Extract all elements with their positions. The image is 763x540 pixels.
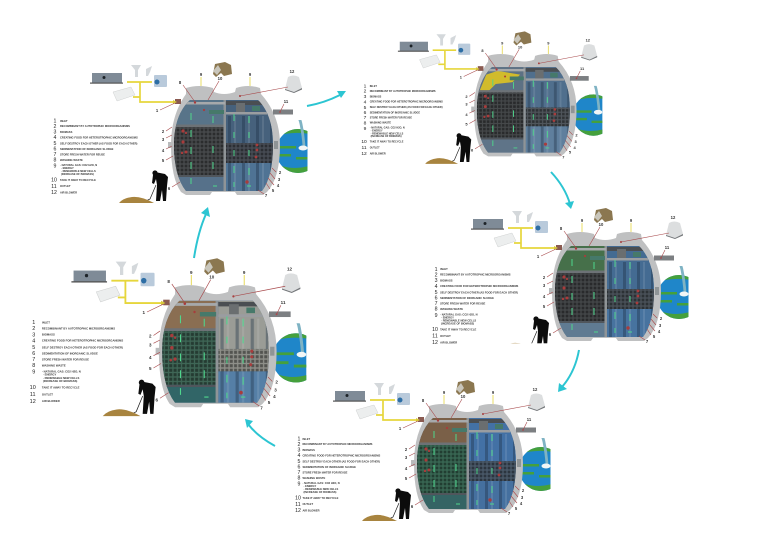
tank diagram: stage 1: 5 — [162, 158, 165, 163]
legend: stage 5: - ENERGY — [43, 373, 56, 377]
legend: stage 1: WASHING WASTE — [60, 158, 83, 162]
legend: stage 2: 11 — [362, 145, 367, 151]
legend: stage 2: 6 — [364, 110, 367, 116]
legend: stage 1: 4 — [54, 135, 57, 141]
tank diagram: stage 4: 7 — [508, 511, 511, 516]
panel: stage 1 (top left) — [51, 62, 310, 203]
legend: stage 2: 7 — [364, 115, 367, 121]
legend: stage 5: AIR BLOWER — [42, 399, 60, 403]
tank diagram: stage 3: 9 — [630, 218, 633, 223]
legend: stage 4: 1 — [298, 436, 301, 442]
tank diagram: stage 5: 2 — [275, 380, 278, 385]
arrow: stage 3 to stage 4 — [558, 350, 579, 392]
legend: stage 5: BIOMASS — [42, 333, 55, 337]
tank diagram: stage 4: 10 — [461, 394, 466, 399]
legend: stage 4: 3 — [298, 448, 301, 454]
tank diagram: stage 4: 1 — [399, 426, 402, 431]
tank diagram: stage 5: 2 — [149, 334, 152, 339]
tank diagram: stage 2: 12 — [586, 38, 591, 43]
legend: stage 4: - ENERGY — [304, 484, 317, 488]
legend: stage 2: 4 — [364, 99, 367, 105]
legend: stage 3: INLET — [440, 267, 448, 271]
tank diagram: stage 2: 4 — [574, 145, 577, 150]
legend: stage 5: 3 — [32, 332, 35, 338]
legend: stage 1: BIOMASS — [60, 130, 73, 134]
tank diagram: stage 2: 4 — [465, 112, 468, 117]
legend: stage 1: - NATURAL GAS: CO2 H2O, N — [60, 163, 97, 167]
legend: stage 3: (INCREASE OF BIOMASS) — [441, 322, 474, 326]
legend: stage 2: 1 — [364, 84, 367, 90]
legend: stage 1: 8 — [54, 158, 57, 164]
legend: stage 4: SELF DESTROY EACH OTHER (AS FOOD FOR EACH OTHER) — [302, 459, 380, 463]
legend: stage 4 — [295, 436, 380, 514]
tank diagram: stage 5: 5 — [149, 366, 152, 371]
panel: stage 4 (bottom centre) — [295, 380, 553, 521]
legend: stage 2: SEDIMENTATION OF INORGANIC SLUDGE — [370, 111, 420, 114]
legend: stage 4: RECOMBINANT BY AUTOTROPHIC MICROORGANISMS — [302, 442, 373, 446]
legend: stage 5: 6 — [32, 351, 35, 357]
legend: stage 4: INLET — [302, 437, 311, 441]
tank diagram: stage 3: 4 — [543, 294, 546, 299]
tank diagram: stage 4: 2 — [522, 488, 525, 493]
legend: stage 1: 6 — [54, 146, 57, 152]
legend: stage 1: 10 — [51, 178, 57, 184]
legend: stage 2: BIOMASS — [370, 95, 382, 98]
tank diagram: stage 4: 2 — [405, 447, 408, 452]
tank diagram: stage 5: 3 — [149, 343, 152, 348]
tank diagram: stage 4: 11 — [527, 417, 532, 422]
legend: stage 5: (INCREASE OF BIOMASS) — [43, 379, 77, 383]
tank diagram: stage 5: 10 — [209, 274, 215, 279]
legend: stage 3: STORE FRESH WATER FOR REUSE — [440, 301, 486, 306]
legend: stage 1: 2 — [54, 124, 57, 130]
legend: stage 3: 12 — [432, 340, 438, 346]
legend: stage 4: 9 — [298, 482, 301, 488]
legend: stage 3: RECOMBINANT BY AUTOTROPHIC MICROORGANISMS — [440, 273, 511, 277]
legend: stage 1: 3 — [54, 130, 57, 136]
tank diagram: stage 2: 11 — [580, 66, 585, 71]
legend: stage 4: CREATING FOOD FOR HETEROTROPHIC MICROORGANISMS — [302, 453, 380, 457]
tank diagram: stage 4: 9 — [492, 390, 495, 395]
legend: stage 5: 10 — [30, 385, 36, 391]
legend: stage 3: - ENERGY — [441, 316, 454, 320]
tank diagram: stage 2: 5 — [569, 150, 572, 155]
tank diagram: stage 1: 12 — [290, 69, 295, 74]
tank diagram: stage 2: 2 — [465, 94, 468, 99]
tank diagram: stage 4: 9 — [443, 390, 446, 395]
tank diagram: stage 2: 7 — [562, 154, 565, 159]
legend: stage 3: AIR BLOWER — [440, 340, 457, 344]
legend: stage 3: 7 — [435, 301, 438, 307]
legend: stage 1: 5 — [54, 141, 57, 147]
tank diagram: stage 4: 12 — [533, 387, 538, 392]
legend: stage 3: 1 — [435, 267, 438, 273]
tank diagram: stage 3: 4 — [658, 329, 661, 334]
legend: stage 5: 8 — [32, 363, 35, 369]
legend: stage 2: STORE FRESH WATER FOR REUSE — [370, 117, 412, 120]
tank diagram: stage 3: 5 — [653, 334, 656, 339]
tank diagram: stage 2: 2 — [575, 133, 578, 138]
legend: stage 3: WASHING WASTE — [440, 307, 463, 311]
tank diagram: stage 2 — [398, 31, 605, 164]
panel: stage 2 (top right) — [361, 31, 605, 164]
tank diagram: stage 3: 9 — [581, 218, 584, 223]
tank diagram: stage 1: 8 — [179, 80, 182, 85]
legend: stage 3: 6 — [435, 295, 438, 302]
legend: stage 1: SELF DESTROY EACH OTHER (AS FOOD FOR EACH OTHER) — [60, 141, 138, 145]
legend: stage 5: OUTLET — [42, 392, 53, 396]
legend: stage 2: 8 — [364, 120, 367, 126]
tank diagram: stage 1: 9 — [249, 72, 252, 77]
legend: stage 1: AIR BLOWER — [60, 190, 77, 194]
tank diagram: stage 3: 2 — [660, 316, 663, 321]
legend: stage 4: 2 — [298, 442, 301, 448]
legend: stage 2: (INCREASE OF BIOMASS) — [371, 135, 402, 138]
tank diagram: stage 3: 10 — [599, 222, 604, 227]
legend: stage 5: INLET — [42, 320, 50, 325]
tank diagram: stage 5: 4 — [273, 394, 276, 399]
legend: stage 2: 2 — [364, 89, 367, 95]
tank diagram: stage 2: 3 — [465, 102, 468, 107]
tank diagram: stage 5 — [71, 258, 309, 416]
tank diagram: stage 1 — [90, 62, 310, 203]
legend: stage 1: INLET — [60, 119, 68, 123]
tank diagram: stage 1: 11 — [284, 99, 289, 104]
tank diagram: stage 2: 6 — [471, 148, 474, 153]
tank diagram: stage 3: 3 — [659, 323, 662, 328]
tank diagram: stage 5: 12 — [287, 266, 292, 272]
legend: stage 2: 5 — [364, 105, 367, 111]
legend: stage 1: CREATING FOOD FOR HETEROTROPHIC MICROORGANISMS — [60, 135, 138, 139]
tank diagram: stage 1: 3 — [278, 177, 281, 182]
legend: stage 2: AIR BLOWER — [370, 152, 386, 155]
legend: stage 5: WASHING WASTE — [42, 363, 66, 367]
legend: stage 1: 11 — [51, 184, 57, 190]
legend: stage 2: - ENERGY — [371, 130, 383, 133]
legend: stage 3: 3 — [435, 278, 438, 284]
legend: stage 2: - RENEWABLE NEW CELLS — [371, 132, 404, 135]
legend: stage 4: - RENEWABLE NEW CELLS — [304, 487, 339, 491]
tank diagram: stage 1: 2 — [279, 170, 282, 175]
legend: stage 5: 9 — [32, 370, 35, 376]
tank diagram: stage 2: 5 — [465, 121, 468, 126]
tank diagram: stage 2: 10 — [518, 44, 523, 49]
legend: stage 4: 4 — [298, 453, 301, 459]
legend: stage 4: 6 — [298, 464, 301, 470]
legend: stage 2: - NATURAL GAS: CO2 H2O, N — [370, 127, 405, 130]
tank diagram: stage 1: 9 — [200, 72, 203, 77]
legend: stage 1 — [51, 118, 138, 196]
legend: stage 3: SELF DESTROY EACH OTHER (AS FOOD FOR EACH OTHER) — [440, 290, 518, 294]
tank diagram: stage 1: 5 — [272, 188, 275, 193]
legend: stage 5: 5 — [32, 345, 35, 351]
legend: stage 1: - RENEWABLE NEW CELLS — [61, 169, 96, 173]
legend: stage 3: 11 — [432, 334, 438, 340]
legend: stage 4: STORE FRESH WATER FOR REUSE — [302, 470, 348, 474]
legend: stage 5: 7 — [32, 357, 35, 363]
legend: stage 1: - ENERGY — [61, 166, 74, 170]
legend: stage 5: 12 — [30, 399, 36, 405]
legend: stage 2 — [361, 84, 443, 157]
tank diagram: stage 3: 2 — [543, 275, 546, 280]
legend: stage 4: OUTLET — [302, 502, 313, 506]
tank diagram: stage 5: 1 — [142, 310, 145, 315]
legend: stage 5: SELF DESTROY EACH OTHER (AS FOOD FOR EACH OTHER) — [42, 345, 123, 349]
legend: stage 1: OUTLET — [60, 184, 71, 188]
legend: stage 5: 2 — [32, 326, 35, 332]
legend: stage 5 — [30, 320, 123, 405]
legend: stage 4: TAKE IT AWAY TO RECYCLE — [302, 496, 339, 500]
legend: stage 3: 8 — [435, 307, 438, 313]
tank diagram: stage 3: 11 — [665, 245, 670, 250]
tank diagram: stage 2: 3 — [574, 139, 577, 144]
tank diagram: stage 1: 7 — [265, 193, 268, 198]
legend: stage 1: 1 — [54, 118, 57, 124]
tank diagram: stage 1: 4 — [277, 183, 280, 188]
tank diagram: stage 1: 4 — [162, 148, 165, 153]
tank diagram: stage 3: 6 — [549, 332, 552, 337]
tank diagram: stage 3: 1 — [537, 254, 540, 259]
legend: stage 1: 9 — [54, 164, 57, 170]
panel: stage 5 (middle left) — [30, 258, 309, 416]
legend: stage 4: (INCREASE OF BIOMASS) — [304, 490, 336, 494]
legend: stage 2: 3 — [364, 94, 367, 100]
legend: stage 2: TAKE IT AWAY TO RECYCLE — [370, 140, 404, 143]
legend: stage 3: BIOMASS — [440, 278, 453, 282]
legend: stage 3: 9 — [435, 313, 438, 319]
tank diagram: stage 1: 2 — [162, 129, 165, 134]
legend: stage 4: 5 — [298, 459, 301, 465]
legend: stage 5: RECOMBINANT BY AUTOTROPHIC MICROORGANISMS — [42, 326, 115, 330]
legend: stage 3: TAKE IT AWAY TO RECYCLE — [440, 327, 476, 331]
arrow: stage 2 to stage 3 — [551, 172, 574, 209]
tank diagram: stage 4: 8 — [422, 398, 425, 403]
legend: stage 2: 12 — [361, 151, 367, 157]
legend: stage 2: 9 — [364, 126, 367, 132]
legend: stage 3: 10 — [432, 327, 438, 333]
legend: stage 3: CREATING FOOD FOR HETEROTROPHIC MICROORGANISMS — [440, 284, 519, 288]
legend: stage 4: SEDIMENTATION OF INORGANIC SLUDGE — [302, 465, 356, 469]
legend: stage 1: 12 — [51, 190, 57, 196]
legend: stage 1: SEDIMENTATION OF INORGANIC SLUDGE — [60, 147, 114, 151]
legend: stage 5: 1 — [32, 320, 35, 326]
tank diagram: stage 1: 10 — [218, 76, 223, 81]
tank diagram: stage 3: 7 — [646, 339, 649, 344]
legend: stage 3: - RENEWABLE NEW CELLS — [441, 319, 476, 323]
tank diagram: stage 4: 6 — [411, 504, 414, 509]
legend: stage 4: BIOMASS — [302, 448, 315, 452]
legend: stage 1: 7 — [54, 152, 57, 158]
tank diagram: stage 5: 9 — [190, 270, 193, 275]
tank diagram: stage 5: 3 — [274, 387, 277, 393]
legend: stage 3 — [432, 267, 519, 346]
legend: stage 5: 4 — [32, 338, 35, 345]
legend: stage 1: (INCREASE OF BIOMASS) — [61, 172, 94, 176]
legend: stage 4: 8 — [298, 476, 301, 482]
legend: stage 5: CREATING FOOD FOR HETEROTROPHIC MICROORGANISMS — [42, 339, 123, 343]
legend: stage 2: 10 — [361, 139, 367, 145]
tank diagram: stage 3: 8 — [560, 226, 563, 231]
legend: stage 1: STORE FRESH WATER FOR REUSE — [60, 152, 105, 156]
legend: stage 2: SELF DESTROY EACH OTHER (AS FOOD FOR EACH OTHER) — [370, 106, 443, 109]
arrow: stage 1 to stage 2 — [307, 91, 346, 106]
tank diagram: stage 4: 5 — [515, 506, 518, 511]
tank diagram: stage 5: 6 — [155, 398, 158, 403]
tank diagram: stage 5: 5 — [268, 400, 271, 405]
tank diagram: stage 2: 9 — [501, 41, 504, 46]
legend: stage 4: AIR BLOWER — [302, 508, 320, 512]
legend: stage 4: - NATURAL GAS: CO2 H2O, N — [302, 481, 340, 485]
tank diagram: stage 1: 6 — [168, 186, 171, 191]
tank diagram: stage 4 — [333, 380, 553, 521]
legend: stage 3: - NATURAL GAS: CO2 H2O, N — [440, 313, 478, 317]
legend: stage 1: TAKE IT AWAY TO RECYCLE — [60, 178, 96, 182]
tank diagram: stage 3 — [471, 208, 691, 351]
tank diagram: stage 3: 3 — [543, 283, 546, 288]
tank diagram: stage 2: 1 — [460, 74, 463, 79]
tank diagram: stage 1: 3 — [162, 137, 165, 142]
tank diagram: stage 5: 11 — [281, 300, 286, 305]
tank diagram: stage 3: 5 — [543, 304, 546, 309]
tank diagram: stage 1: 1 — [156, 108, 159, 113]
legend: stage 4: 10 — [295, 496, 301, 502]
legend: stage 3: 4 — [435, 284, 438, 290]
legend: stage 2: OUTLET — [370, 146, 380, 149]
tank diagram: stage 4: 4 — [520, 501, 523, 506]
arrow: stage 5 to stage 1 — [194, 207, 210, 258]
legend: stage 2: INLET — [370, 85, 377, 88]
tank diagram: stage 5: 8 — [167, 279, 170, 284]
legend: stage 5: STORE FRESH WATER FOR REUSE — [42, 357, 89, 361]
tank diagram: stage 4: 5 — [405, 476, 408, 481]
tank diagram: stage 2: 8 — [481, 48, 484, 53]
legend: stage 4: 11 — [295, 502, 301, 508]
tank diagram: stage 5: 9 — [243, 270, 246, 275]
legend: stage 2: CREATING FOOD FOR HETEROTROPHIC MICROORGANISMS — [370, 101, 443, 104]
legend: stage 1: RECOMBINANT BY AUTOTROPHIC MICROORGANISMS — [60, 124, 130, 128]
legend: stage 5: - NATURAL GAS: CO2 H2O, N — [42, 369, 81, 373]
legend: stage 2: WASHING WASTE — [370, 122, 391, 125]
legend: stage 5: SEDIMENTATION OF INORGANIC SLUDGE — [42, 351, 98, 355]
tank diagram: stage 5: 7 — [260, 405, 263, 410]
tank diagram: stage 3: 12 — [671, 215, 676, 220]
tank diagram: stage 4: 3 — [405, 455, 408, 460]
legend: stage 3: 5 — [435, 290, 438, 296]
legend: stage 4: 7 — [298, 470, 301, 476]
tank diagram: stage 2: 9 — [547, 41, 550, 46]
legend: stage 3: 2 — [435, 272, 438, 278]
tank diagram: stage 4: 3 — [521, 495, 524, 500]
legend: stage 4: WASHING WASTE — [302, 476, 325, 480]
legend: stage 3: OUTLET — [440, 334, 451, 338]
legend: stage 5: 11 — [30, 392, 36, 398]
legend: stage 2: RECOMBINANT BY AUTOTROPHIC MICROORGANISMS — [370, 90, 436, 93]
legend: stage 5: TAKE IT AWAY TO RECYCLE — [42, 385, 80, 389]
arrow: stage 4 to stage 5 — [245, 419, 275, 446]
legend: stage 3: SEDIMENTATION OF INORGANIC SLUDGE — [440, 296, 494, 300]
tank diagram: stage 4: 4 — [405, 466, 408, 471]
legend: stage 5: - RENEWABLE NEW CELLS — [43, 376, 79, 380]
panel: stage 3 (middle right) — [432, 208, 691, 351]
legend: stage 4: 12 — [295, 508, 301, 514]
tank diagram: stage 5: 4 — [149, 355, 152, 360]
